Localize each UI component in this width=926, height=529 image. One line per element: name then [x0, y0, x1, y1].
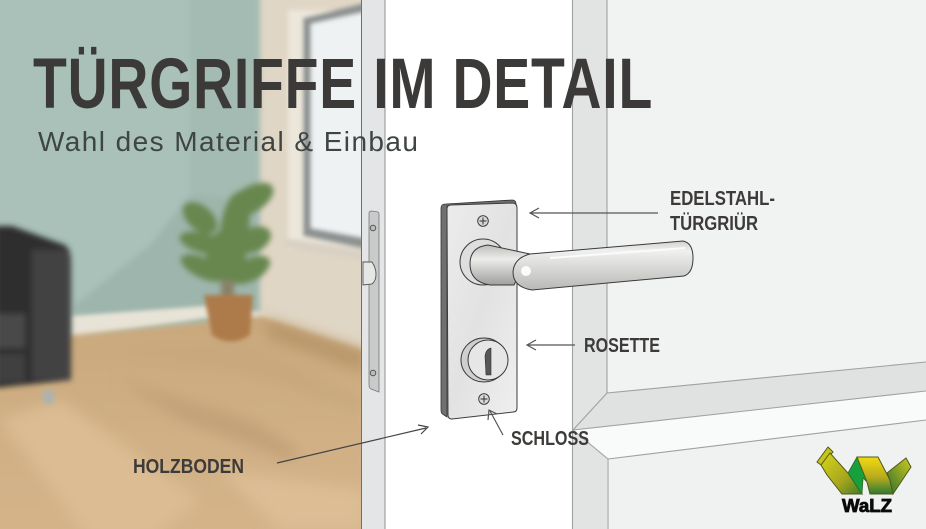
- arrow: schloss: [488, 410, 503, 435]
- blurred room background: [0, 0, 368, 529]
- label: schloss: SCHLOSS: [511, 428, 589, 450]
- lock cylinder: [461, 338, 508, 382]
- arrow: rosette: [527, 340, 575, 350]
- rosette ring: [460, 239, 506, 285]
- label: edelstahl: [670, 188, 775, 235]
- highlight: [550, 248, 685, 258]
- sofa: [0, 226, 71, 404]
- arrow: edelstahl: [530, 208, 658, 218]
- screw bottom: [479, 394, 489, 404]
- label: edelstahl: EDELSTAHL-: [670, 188, 775, 210]
- label: rosette: ROSETTE: [584, 335, 660, 357]
- label: edelstahl: TÜRGRIÜR: [670, 212, 758, 235]
- edge latch plate: [363, 211, 379, 392]
- baseboard: [70, 306, 365, 362]
- floor streaks: [0, 318, 365, 529]
- door leaf and frame: [361, 0, 926, 529]
- potted plant: [177, 176, 279, 342]
- handle lever: [513, 241, 693, 290]
- moulding bands: [573, 362, 926, 430]
- logo: Walz: WaLZ: [842, 496, 892, 516]
- frame strip: [572, 0, 607, 529]
- handle neck: [470, 245, 530, 285]
- subtitle: Wahl des Material & Einbau: [38, 126, 418, 157]
- label: holzboden: HOLZBODEN: [133, 456, 244, 478]
- wood floor: [0, 316, 365, 529]
- logo: Walz: [817, 447, 911, 516]
- back plate: [441, 200, 517, 419]
- screw top: [478, 216, 488, 226]
- title: TÜRGRIFFE IM DETAIL: [33, 44, 652, 124]
- handle assembly: [441, 200, 693, 419]
- window: [285, 3, 368, 262]
- arrow: holzboden: [277, 425, 428, 463]
- arrows: [277, 208, 658, 463]
- wall: [0, 0, 260, 335]
